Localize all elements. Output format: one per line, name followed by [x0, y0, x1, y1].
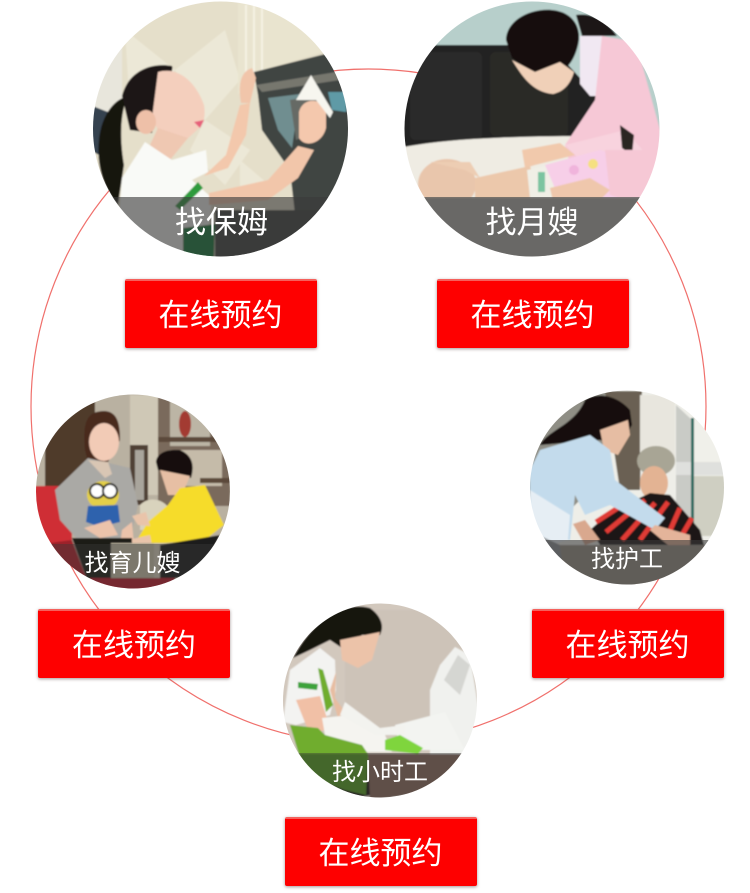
circle: find nanny: [90, 0, 352, 260]
button: hourly worker booking: [284, 817, 476, 886]
caption label: 找育儿嫂: [84, 550, 180, 577]
caption label: 找月嫂: [486, 205, 578, 240]
button: matron booking: 在线预约: [470, 298, 594, 333]
button: matron booking: [436, 279, 628, 348]
photo: nanny cleaning range hood: [90, 0, 352, 260]
caption band: [424, 197, 640, 256]
button: hourly worker booking: 在线预约: [318, 836, 442, 871]
caption band: [546, 540, 708, 584]
button: nanny booking: 在线预约: [158, 298, 282, 333]
caption label: 找保姆: [175, 205, 268, 240]
caption label: 找护工: [591, 546, 663, 573]
circle: find childcare nanny: [34, 393, 232, 591]
photo: hourly worker cleaning toilet: [281, 602, 480, 800]
caption band: [298, 753, 462, 798]
circle: find hourly worker: [281, 602, 480, 800]
caption label: 找小时工: [332, 759, 428, 786]
connecting ring: [31, 69, 706, 744]
caption band: [52, 544, 214, 588]
caption band: [112, 197, 328, 256]
button: nanny booking: [124, 279, 316, 348]
photo: matron changing baby: [400, 0, 662, 259]
button: childcare booking: [38, 608, 230, 678]
button: childcare booking: 在线预约: [72, 628, 196, 662]
circle: find care worker: [528, 389, 726, 590]
circle: find maternity matron: [400, 0, 662, 259]
button: care worker booking: 在线预约: [566, 628, 690, 662]
photo: care worker with elderly woman: [528, 389, 726, 590]
photo: childcare nanny with boy: [34, 393, 232, 591]
button: care worker booking: [532, 608, 724, 678]
